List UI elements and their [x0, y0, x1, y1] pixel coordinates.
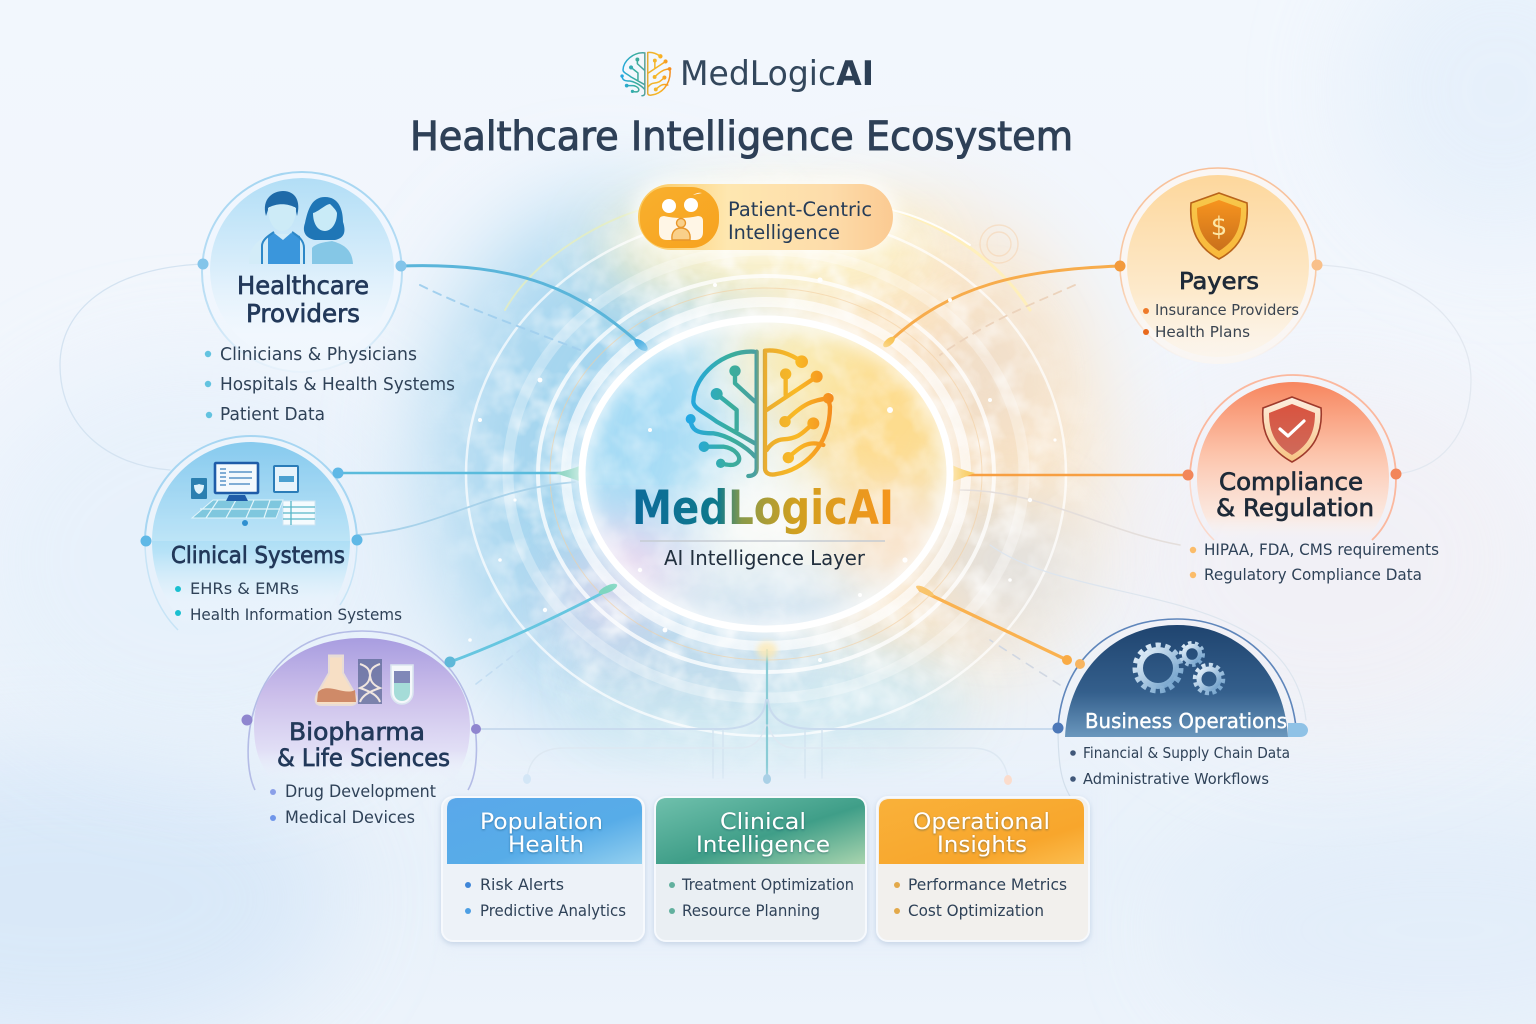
- bullet list: [1143, 301, 1299, 341]
- icon: check shield: [1263, 397, 1321, 462]
- heading: Clinical Systems: [171, 543, 345, 569]
- connection nodes: [1114, 260, 1126, 272]
- line: business dashed: [990, 640, 1060, 685]
- pill: patient-centric intelligence: [632, 178, 899, 256]
- card title: Health: [508, 833, 584, 858]
- panel: payers: [1114, 168, 1322, 364]
- line: clinical dashed: [357, 482, 575, 535]
- line: hub right: [768, 700, 1058, 729]
- card list: [465, 875, 626, 920]
- bullet list: Medical Devices: [285, 808, 415, 827]
- line: compliance faint: [960, 490, 1180, 545]
- bullet list: Drug Development: [285, 782, 437, 801]
- sparkles: [468, 277, 1057, 662]
- beam tips: [555, 335, 975, 659]
- card list: Cost Optimization: [908, 901, 1044, 920]
- card list: Predictive Analytics: [480, 901, 626, 920]
- bullet list: [1070, 744, 1290, 788]
- line: business to core: [920, 590, 1067, 660]
- card: population health: [442, 797, 644, 941]
- icon: faint emblem: [980, 225, 1018, 263]
- line: providers dashed: [420, 285, 580, 350]
- bullet list: [1190, 540, 1439, 584]
- title: Healthcare Intelligence Ecosystem: [410, 114, 1073, 160]
- bullet list: Health Plans: [1155, 323, 1250, 341]
- core subtitle: AI Intelligence Layer: [664, 546, 866, 570]
- core wordmark: MedLogicAI: [632, 481, 894, 536]
- connector lines: [60, 264, 1471, 778]
- card list: [894, 875, 1067, 920]
- panel: healthcare providers: [198, 172, 455, 425]
- line: card arcs: [527, 725, 1008, 778]
- connection nodes: [198, 258, 406, 272]
- pill label: Intelligence: [728, 221, 840, 244]
- card title: Operational: [913, 810, 1050, 835]
- central core ellipse: [555, 310, 975, 640]
- bullet list: HIPAA, FDA, CMS requirements: [1204, 540, 1439, 559]
- card title: Insights: [937, 833, 1027, 858]
- bullet list: Financial & Supply Chain Data: [1083, 744, 1290, 762]
- card header: [879, 799, 1084, 864]
- panel: business operations: [1052, 619, 1308, 810]
- icon: clinicians: [249, 191, 353, 264]
- bullet list: Administrative Workflows: [1083, 770, 1269, 788]
- connection nodes: [140, 468, 362, 546]
- connection nodes: [1052, 722, 1064, 734]
- line: outer left loop: [60, 264, 203, 470]
- heading: Payers: [1179, 269, 1259, 295]
- line: providers to core: [401, 266, 642, 346]
- icon: dollar shield: [1191, 193, 1247, 259]
- bullet list: Patient Data: [220, 404, 325, 425]
- heading: Biopharma: [289, 718, 425, 746]
- card list: Treatment Optimization: [681, 875, 854, 894]
- line: biopharma dashed: [476, 650, 520, 684]
- card list: Resource Planning: [682, 901, 820, 920]
- bottom band: [440, 778, 1100, 958]
- card header: [447, 798, 642, 864]
- connection nodes: [242, 714, 481, 734]
- heading: Providers: [246, 299, 360, 328]
- icon: dollar shield: $: [1211, 212, 1227, 242]
- heading: & Life Sciences: [277, 744, 450, 772]
- line: faint arc over business: [990, 545, 1306, 720]
- line: clinical to core: [338, 472, 578, 474]
- icon: logo brain: [620, 52, 671, 96]
- bullet list: [175, 579, 402, 624]
- core divider: [640, 540, 885, 542]
- card list: [669, 875, 854, 920]
- card junction nodes: [523, 774, 1012, 785]
- heading: Business Operations: [1085, 709, 1287, 733]
- card title: Intelligence: [696, 833, 830, 858]
- panel: compliance and regulation: [1182, 375, 1439, 584]
- icon: patient family: [659, 193, 703, 240]
- heading: Healthcare: [237, 271, 369, 300]
- icon: clinical computers: [191, 463, 315, 526]
- bullet list: Health Information Systems: [190, 605, 402, 624]
- line: biopharma to core: [450, 588, 612, 662]
- central glow and rings: [400, 160, 1140, 800]
- bullet list: EHRs & EMRs: [190, 579, 299, 598]
- bullet list: Hospitals & Health Systems: [220, 374, 455, 395]
- bullet list: Clinicians & Physicians: [220, 344, 417, 365]
- panel: clinical systems: [140, 436, 402, 630]
- heading: Compliance: [1219, 468, 1363, 496]
- icon: lab flask and tube: [316, 656, 413, 705]
- header logo: [620, 52, 874, 96]
- line: outer right loop: [1317, 265, 1471, 474]
- icon: central brain: [686, 350, 834, 476]
- logo wordmark: MedLogicAI: [680, 54, 874, 94]
- card: clinical intelligence: [655, 797, 866, 941]
- panel: biopharma and life sciences: [242, 631, 481, 827]
- card title: Clinical: [720, 810, 806, 835]
- card title: Population: [480, 810, 603, 835]
- bullet list: Insurance Providers: [1155, 301, 1299, 319]
- line: compliance to core: [955, 474, 1188, 476]
- line: payers dashed: [940, 285, 1075, 355]
- card: operational insights: [877, 797, 1089, 941]
- bullet list: [205, 344, 455, 425]
- card list: Risk Alerts: [480, 875, 564, 894]
- line: core to lower hub: [766, 650, 768, 778]
- bullet list: [270, 782, 437, 827]
- icon: gears: [1136, 643, 1223, 693]
- line: hub left: [476, 700, 766, 729]
- heading: & Regulation: [1216, 494, 1374, 522]
- line: vertical feeders: [713, 730, 822, 778]
- line: payers to core: [888, 266, 1120, 343]
- glowing arcs from pill: [505, 210, 1030, 310]
- card header: [656, 798, 865, 864]
- pill label: Patient-Centric: [728, 198, 872, 221]
- bullet list: Regulatory Compliance Data: [1204, 565, 1422, 584]
- card list: Performance Metrics: [908, 875, 1067, 894]
- connection nodes: [1182, 468, 1402, 480]
